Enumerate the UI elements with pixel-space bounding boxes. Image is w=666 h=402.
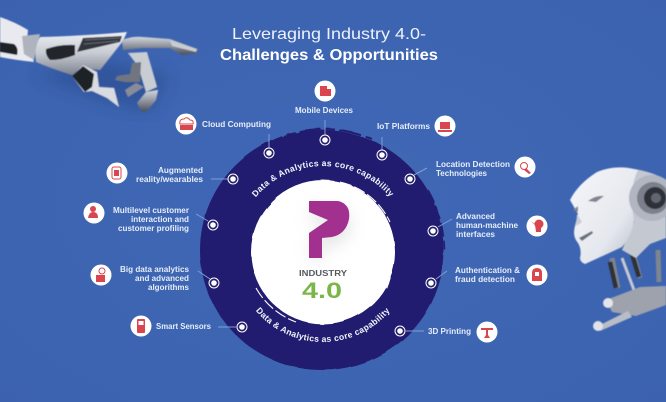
item: Big data analytics	[90, 264, 190, 292]
item: Mobile Devices: Mobile Devices	[295, 106, 354, 115]
item: Cloud Computing	[176, 114, 271, 134]
white core	[251, 180, 395, 324]
nodes	[208, 135, 438, 336]
connectors	[196, 120, 452, 331]
item: Big data analytics: algorithms	[148, 283, 190, 292]
item: Augmented reality/wearables: Augmented	[158, 166, 203, 175]
core brush strokes	[256, 182, 392, 322]
item: Advanced human-machine interfaces	[456, 212, 548, 239]
curved text: bottom: Data & Analytics as core capability	[256, 307, 390, 342]
ring: brush-edged navy disc	[200, 129, 445, 370]
Industry label: INDUSTRY	[299, 268, 347, 278]
item: Augmented reality/wearables: reality/wearables	[136, 175, 204, 184]
item: Authentication and fraud detection: fraud detection	[455, 275, 515, 284]
item: Smart Sensors	[130, 316, 212, 336]
item: Augmented reality/wearables	[106, 162, 204, 184]
item: Location Detection Technologies: Technologies	[436, 169, 488, 178]
logo P	[309, 201, 350, 261]
item: Multilevel customer: customer profiling	[118, 224, 189, 233]
item: Advanced human-machine interfaces: interfaces	[456, 230, 496, 239]
title: Challenges & Opportunities	[220, 47, 438, 64]
item: 3D Printing	[428, 322, 498, 342]
robot head	[570, 167, 666, 331]
4.0 label: 4.0	[302, 278, 342, 303]
item: Multilevel customer	[84, 202, 189, 233]
item: Advanced human-machine interfaces: human-machine	[456, 221, 519, 230]
item: IoT Platforms: IoT Platforms	[377, 122, 431, 131]
item: Multilevel customer: interaction and	[131, 215, 189, 224]
robotic hand	[0, 17, 198, 112]
item: Location Detection Technologies	[436, 156, 536, 178]
item: Mobile Devices	[295, 80, 354, 115]
curved text: top: Data & Analytics as core capability	[252, 161, 394, 197]
item: Smart Sensors: Smart Sensors	[156, 322, 212, 331]
item: Advanced human-machine interfaces: Advanced	[456, 212, 495, 221]
item: Multilevel customer: Multilevel customer	[113, 206, 189, 215]
title	[220, 26, 438, 64]
central ring	[200, 128, 446, 370]
title: Leveraging Industry 4.0-	[232, 26, 426, 43]
item: Big data analytics: and advanced	[135, 274, 189, 283]
item: Authentication and fraud detection: Authentication &	[455, 266, 520, 275]
item: Authentication and fraud detection	[455, 264, 548, 286]
item: Location Detection Technologies: Location Detection	[436, 160, 510, 169]
item: Cloud Computing: Cloud Computing	[202, 120, 271, 129]
item: IoT Platforms	[377, 116, 456, 136]
item: 3D Printing: 3D Printing	[428, 327, 471, 336]
item: Big data analytics: Big data analytics	[120, 265, 190, 274]
